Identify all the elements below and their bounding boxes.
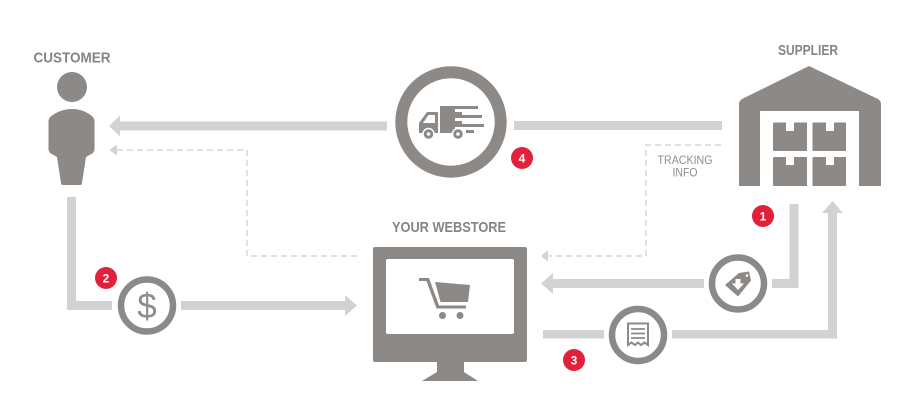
label: tracking info: TRACKING [658, 155, 713, 167]
icon: delivery truck circle [401, 72, 501, 172]
icon: customer person [48, 72, 94, 185]
receipt [628, 324, 648, 345]
box [812, 122, 846, 151]
icon: tag circle [712, 258, 764, 310]
label: supplier: SUPPLIER [778, 42, 838, 59]
truck [419, 106, 484, 140]
step badge 1: 1 [760, 210, 767, 224]
icon: supplier warehouse [739, 66, 881, 186]
arrow: payment to webstore [181, 295, 357, 316]
arrow: order tag to webstore [541, 273, 704, 294]
box [773, 122, 807, 151]
arrow: receipt to supplier [672, 201, 843, 338]
arrow: webstore to receipt [543, 330, 604, 338]
shopping cart [419, 278, 470, 319]
tag [725, 272, 751, 296]
step badge 2: 2 [103, 272, 110, 286]
label: tracking info: INFO [672, 168, 698, 180]
arrow: dashed webstore to customer [110, 144, 359, 256]
icon: dollar circle [121, 280, 173, 332]
arrow: supplier to truck [514, 121, 722, 130]
step badge 3 [563, 349, 585, 371]
arrow: truck to customer [109, 116, 387, 136]
step badge 4: 4 [519, 152, 526, 166]
label: customer: CUSTOMER [34, 50, 111, 66]
label: your webstore: YOUR WEBSTORE [392, 219, 506, 236]
icon: webstore monitor [373, 247, 527, 381]
step badge 3: 3 [571, 354, 578, 368]
step badge 2 [95, 267, 117, 289]
arrow: supplier to order tag [772, 204, 798, 288]
box [773, 157, 807, 186]
icon: dollar circle: $ [137, 287, 157, 326]
arrow: dashed supplier to webstore [541, 145, 721, 262]
step badge 1 [752, 205, 774, 227]
arrow: customer to payment [67, 197, 112, 310]
step badge 4 [511, 147, 533, 169]
box [812, 157, 846, 186]
label: tracking info [658, 155, 713, 180]
icon: receipt circle [612, 309, 664, 361]
